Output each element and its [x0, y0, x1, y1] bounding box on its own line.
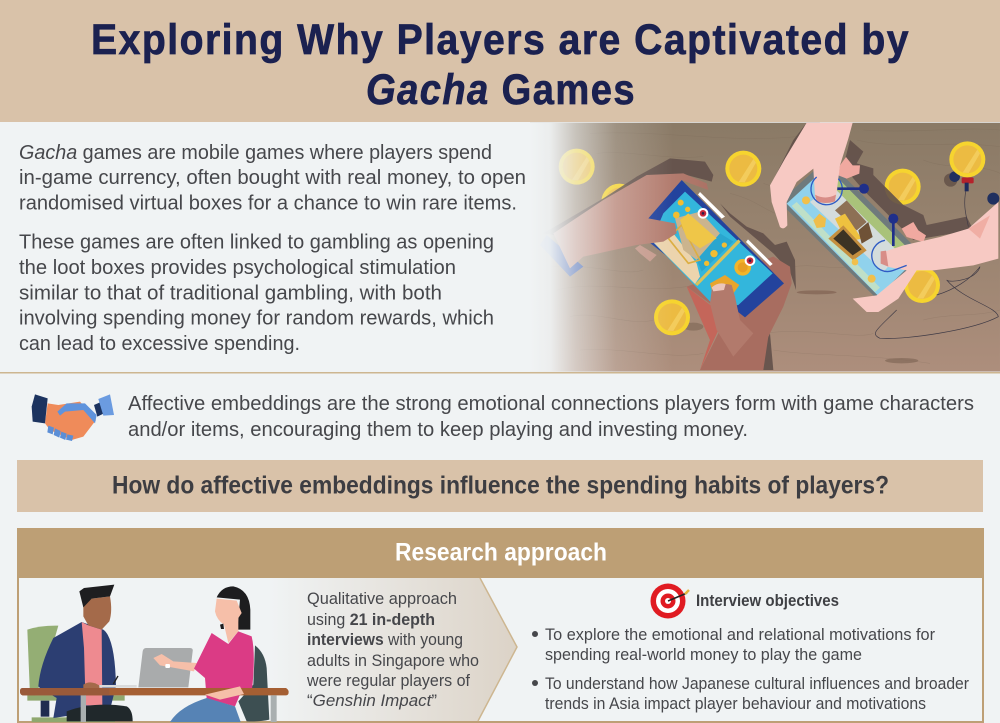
title banner — [0, 0, 1000, 122]
title: Gacha Games — [366, 66, 636, 114]
objectives list: trends in Asia impact player behaviour and motivations — [545, 694, 926, 713]
intro text block: involving spending money for random rewards, which — [19, 306, 494, 330]
approach text: using 21 in-depth — [307, 610, 435, 629]
divider line — [0, 372, 1000, 374]
earphones — [875, 190, 998, 339]
far-left phone edge — [552, 240, 584, 276]
intro text block: Gacha games are mobile games where players spend — [19, 141, 492, 164]
intro text block: similar to that of traditional gambling, with both — [19, 282, 442, 304]
approach text: were regular players of — [306, 671, 470, 690]
approach text: Qualitative approach — [307, 589, 457, 608]
coins — [559, 149, 940, 335]
intro text block: the loot boxes provides psychological stimulation — [19, 256, 456, 279]
research question banner: How do affective embeddings influence the spending habits of players? — [112, 472, 889, 500]
objectives list: spending real-world money to play the game — [545, 645, 862, 664]
affective embeddings definition: Affective embeddings are the strong emotional connections players form with game characters — [128, 393, 974, 415]
affective embeddings definition: and/or items, encouraging them to keep playing and investing money. — [128, 419, 748, 441]
intro text block: can lead to excessive spending. — [19, 332, 300, 355]
research question banner — [17, 460, 983, 512]
objectives list — [532, 625, 969, 713]
icon: handshake — [32, 394, 114, 441]
approach text: “Genshin Impact” — [307, 691, 437, 710]
approach text: adults in Singapore who — [307, 651, 479, 670]
approach text: interviews with young — [307, 630, 463, 649]
objectives list: To understand how Japanese cultural influences and broader — [545, 674, 969, 693]
objectives list: To explore the emotional and relational motivations for — [545, 625, 935, 644]
hand and phone shadows — [543, 123, 973, 370]
right player's hands — [770, 123, 998, 312]
illustration: hands playing gacha games on phones — [530, 123, 1000, 372]
title — [91, 16, 910, 114]
right phone with treasure chest — [786, 172, 912, 296]
intro text block: randomised virtual boxes for a chance to win rare items. — [19, 192, 517, 214]
title: Exploring Why Players are Captivated by — [91, 16, 910, 64]
research approach heading: Research approach — [395, 538, 607, 566]
left edge fade — [530, 123, 673, 372]
affective embeddings definition — [128, 393, 974, 441]
icon: target with dart — [650, 584, 689, 618]
left phone with loot game — [540, 173, 792, 370]
panel: research approach — [17, 528, 984, 722]
intro text block: in-game currency, often bought with real money, to open — [19, 166, 526, 189]
touch indicators — [811, 177, 907, 271]
lower thumb — [710, 284, 753, 357]
illustration: interview at a desk — [20, 585, 289, 722]
approach text — [306, 589, 479, 710]
intro text block — [19, 141, 526, 355]
research approach heading — [17, 528, 984, 578]
arrow background — [270, 578, 517, 721]
intro text block: These games are often linked to gambling as opening — [19, 230, 494, 254]
upper hand — [553, 173, 708, 268]
interview objectives heading: Interview objectives — [696, 592, 839, 610]
